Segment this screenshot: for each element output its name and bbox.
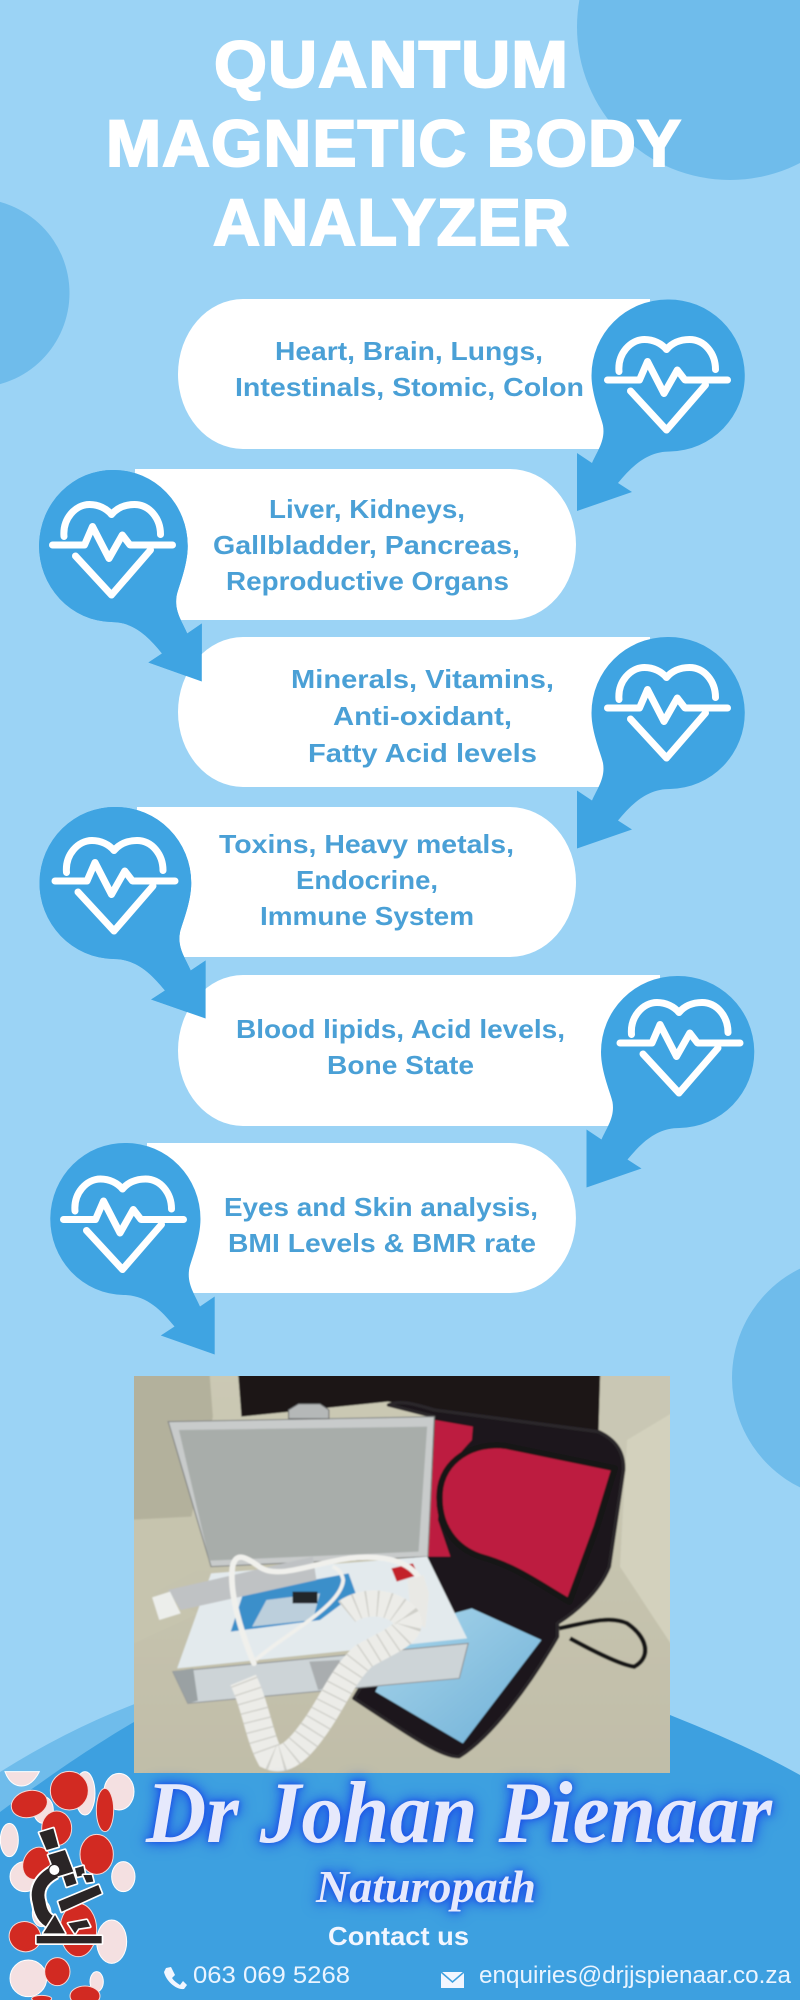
text: organs 1: Intestinals, Stomic, Colon xyxy=(235,372,584,402)
panel: minerals, vitamins xyxy=(39,470,745,848)
title: ANALYZER xyxy=(213,185,570,259)
decorative circle top right xyxy=(577,0,800,180)
red strap xyxy=(428,1420,473,1557)
text: organs 2: Liver, Kidneys, xyxy=(269,494,465,524)
icon repaint: heart icon 4 xyxy=(55,840,175,931)
plug xyxy=(391,1563,418,1582)
text: toxins: Toxins, Heavy metals, xyxy=(219,829,514,859)
text: eyes xyxy=(224,1192,538,1258)
red blood cells xyxy=(5,1771,114,2000)
black cushion xyxy=(238,1370,600,1432)
text: nutrients: Fatty Acid levels xyxy=(308,738,537,768)
panel: heart, brain, lungs xyxy=(178,299,745,511)
icon: phone xyxy=(164,1967,187,1989)
text: toxins: Immune System xyxy=(260,901,474,931)
phone number: 063 069 5268 xyxy=(193,1962,350,1989)
text: organs 1: Heart, Brain, Lungs, xyxy=(275,336,543,366)
decorative circle left xyxy=(0,198,70,388)
text: organs 2: Gallbladder, Pancreas, xyxy=(213,530,520,560)
text: nutrients xyxy=(291,664,554,768)
pale blood cells xyxy=(0,1772,135,1997)
text: blood: Blood lipids, Acid levels, xyxy=(236,1014,565,1044)
text: toxins: Endocrine, xyxy=(296,865,438,895)
icon repaint: heart icon 2 xyxy=(52,504,172,595)
pouch xyxy=(354,1403,624,1757)
sofa xyxy=(127,1370,677,1780)
text: nutrients: Minerals, Vitamins, xyxy=(291,664,554,694)
cells and microscope emblem xyxy=(0,1771,135,2000)
text: eyes: Eyes and Skin analysis, xyxy=(224,1192,538,1222)
subtitle: Naturopath: Naturopath xyxy=(315,1861,536,1912)
email address: enquiries@drjjspienaar.co.za xyxy=(479,1962,792,1989)
footer blue shape xyxy=(0,1675,800,2000)
text: organs 2: Reproductive Organs xyxy=(226,566,509,596)
microscope xyxy=(37,1828,102,1943)
thin cable xyxy=(232,1557,418,1663)
metal probe xyxy=(168,1557,316,1610)
title xyxy=(106,27,682,259)
arrow tail over panel 3 xyxy=(39,470,202,682)
coiled cable xyxy=(243,1603,408,1758)
case base xyxy=(177,1557,467,1668)
heading: contact us: Contact us xyxy=(328,1921,469,1951)
pin: heart icon 5 xyxy=(586,976,754,1188)
decorative circle right xyxy=(732,1256,800,1500)
text: eyes: BMI Levels & BMR rate xyxy=(228,1228,536,1258)
title: MAGNETIC BODY xyxy=(106,106,682,180)
pin: heart icon 4 xyxy=(40,807,206,1018)
text: blood: Bone State xyxy=(327,1050,474,1080)
arrow tail over panel 5 xyxy=(40,807,206,1018)
pin: heart icon 2 xyxy=(39,470,202,682)
case lid xyxy=(168,1417,434,1567)
text: blood xyxy=(236,1014,565,1080)
panel: eyes and skin xyxy=(50,1143,576,1354)
text: organs 2 xyxy=(213,494,520,596)
panel: toxins, heavy metals xyxy=(40,807,576,1018)
icon: email xyxy=(441,1972,464,1988)
pin: heart icon 1 xyxy=(577,299,745,511)
title: QUANTUM xyxy=(214,27,569,101)
panel: blood lipids xyxy=(40,807,754,1188)
pin: heart icon 6 xyxy=(50,1143,215,1354)
photo: analyzer device kit xyxy=(127,1370,677,1780)
strap loop xyxy=(559,1620,645,1667)
panel: liver, kidneys xyxy=(39,469,576,682)
text: nutrients: Anti-oxidant, xyxy=(333,701,512,731)
name: Dr Johan Pienaar: Dr Johan Pienaar xyxy=(145,1765,773,1862)
booklet xyxy=(375,1608,541,1743)
text: organs 1 xyxy=(235,336,584,402)
text: toxins xyxy=(219,829,514,931)
pin: heart icon 3 xyxy=(577,637,745,848)
